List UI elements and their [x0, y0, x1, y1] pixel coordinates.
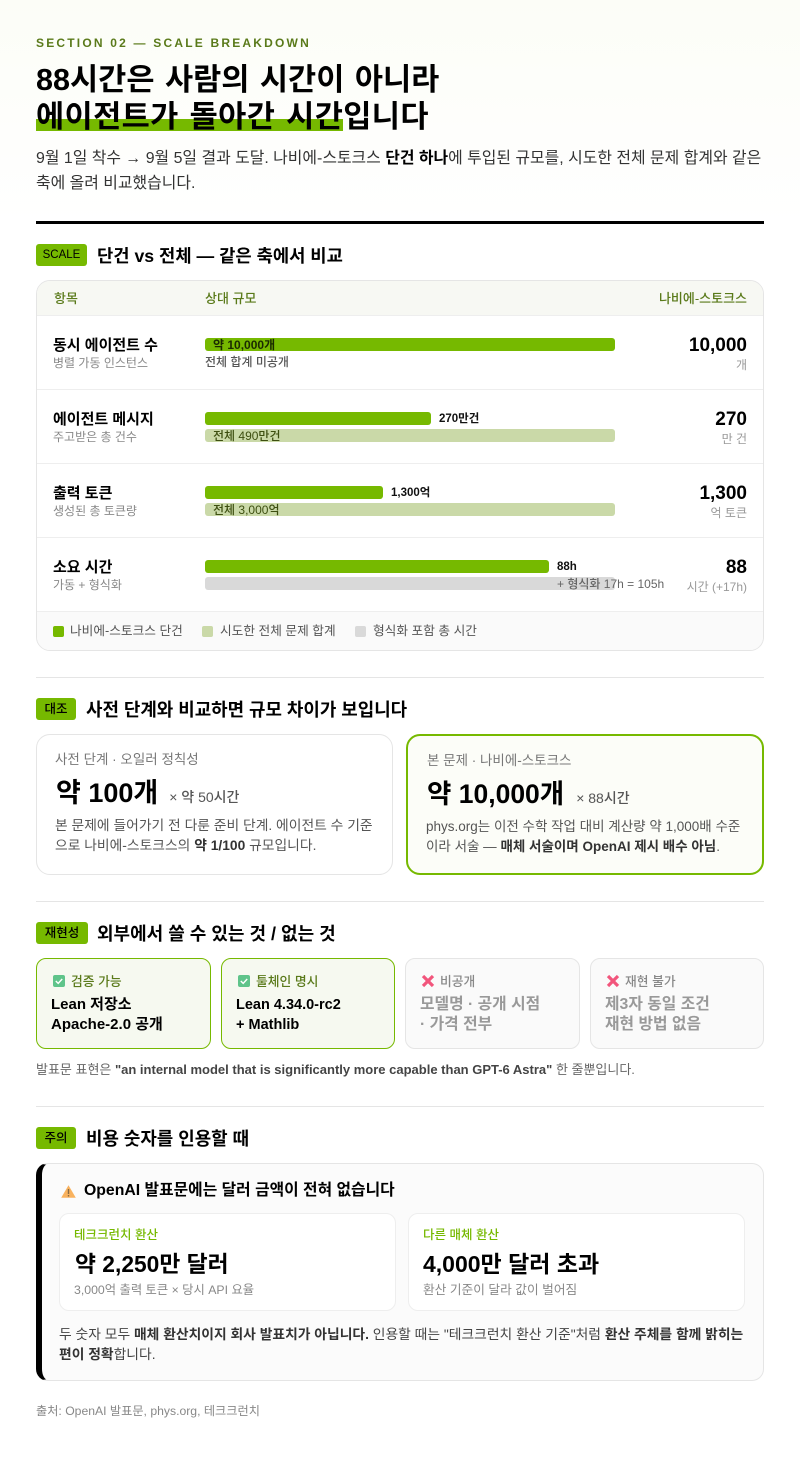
card: not reproducible — [590, 958, 764, 1049]
row: output tokens: 출력 토큰 — [53, 485, 112, 502]
heading: scale comparison: 단건 vs 전체 — 같은 축에서 비교 — [97, 246, 343, 266]
card: other media estimate: 다른 매체 환산 — [423, 1228, 499, 1242]
bar: 10,000 agents: 약 10,000개 — [213, 338, 275, 352]
card: other media estimate — [408, 1213, 745, 1311]
panel: scale comparison table — [36, 280, 764, 651]
row: output tokens: 억 토큰 — [711, 506, 747, 520]
card: verifiable: Apache-2.0 공개 — [51, 1016, 163, 1033]
icon: cross — [422, 974, 434, 988]
bar: 10,000 agents — [205, 338, 615, 351]
panel: preliminary stage card: 약 100개 × 약 50시간 — [56, 778, 239, 808]
panel: main problem card: phys.org는 이전 수학 작업 대비 계산량 약 1,000배 수준 — [426, 819, 740, 834]
panel: cost callout — [36, 1163, 764, 1381]
header rule — [36, 221, 764, 224]
bar: total 490: 전체 490만건 — [213, 429, 281, 443]
row: output tokens: 생성된 총 토큰량 — [53, 504, 137, 518]
table header row: 상대 규모 — [205, 291, 256, 306]
card: verifiable: Lean 저장소 — [51, 996, 132, 1013]
card: TechCrunch estimate: 3,000억 출력 토큰 × 당시 API 요율 — [74, 1283, 254, 1297]
lead paragraph: 축에 올려 비교했습니다. — [36, 175, 195, 192]
row: concurrent agents: 개 — [736, 358, 747, 372]
eyebrow: section label: SECTION 02 — SCALE BREAKDOWN — [36, 36, 311, 50]
card: toolchain: + Mathlib — [236, 1017, 299, 1033]
card: other media estimate: 4,000만 달러 초과 — [423, 1251, 599, 1277]
panel: preliminary stage card — [36, 734, 393, 875]
title highlight — [36, 119, 343, 131]
table header row: 나비에-스토크스 — [659, 291, 747, 306]
row: output tokens: 1,300 — [699, 483, 747, 504]
badge: caution: 주의 — [44, 1131, 68, 1145]
row: concurrent agents: 병렬 가동 인스턴스 — [53, 356, 148, 370]
panel: main problem card — [406, 734, 764, 875]
card: TechCrunch estimate: 약 2,250만 달러 — [75, 1251, 229, 1277]
row: elapsed time: 시간 (+17h) — [687, 580, 747, 594]
badge: SCALE — [36, 244, 87, 266]
lead paragraph: 9월 1일 착수 → 9월 5일 결과 도달. 나비에-스토크스 단건 하나에 투입된 규모를, 시도한 전체 문제 합계와 같은 — [36, 150, 761, 167]
legend: 형식화 포함 총 시간 — [373, 624, 477, 638]
panel: main problem card: 이라 서술 — 매체 서술이며 OpenAI 제시 배수 아님. — [426, 839, 720, 854]
card: TechCrunch estimate — [59, 1213, 396, 1311]
bar: total 490 — [205, 429, 615, 442]
icon: check — [238, 975, 250, 987]
card: not reproducible: 제3자 동일 조건 — [605, 996, 710, 1013]
title: 에이전트가 돌아간 시간입니다 — [36, 100, 429, 134]
card: toolchain: 툴체인 명시 — [256, 974, 318, 989]
heading: contrast: 사전 단계와 비교하면 규모 차이가 보입니다 — [86, 700, 407, 720]
badge: contrast — [36, 698, 76, 720]
card: toolchain: Lean 4.34.0-rc2 — [236, 997, 341, 1013]
heading: reproducibility: 외부에서 쓸 수 있는 것 / 없는 것 — [97, 924, 336, 944]
callout title: OpenAI 발표문에는 달러 금액이 전혀 없습니다 — [84, 1182, 395, 1199]
card: undisclosed — [405, 958, 580, 1049]
legend — [37, 612, 763, 650]
source: 출처: OpenAI 발표문, phys.org, 테크크런치 — [36, 1404, 260, 1418]
table header row — [37, 281, 763, 316]
panel: main problem card: 약 10,000개 × 88시간 — [427, 779, 630, 809]
card: verifiable: 검증 가능 — [71, 974, 122, 989]
row: elapsed time: + 형식화 17h = 105h — [557, 577, 664, 591]
header background tint — [0, 0, 800, 224]
card: not reproducible: 재현 불가 — [625, 974, 676, 989]
row: agent messages: 270만건 — [439, 413, 479, 425]
bar: total 3,000: 전체 3,000억 — [213, 503, 279, 517]
legend: 나비에-스토크스 단건 — [70, 624, 183, 638]
panel: preliminary stage card: 사전 단계 · 오일러 정칙성 — [55, 752, 199, 767]
card: undisclosed: 비공개 — [440, 974, 475, 989]
card: undisclosed: · 가격 전부 — [420, 1016, 492, 1033]
badge: reproducibility — [36, 922, 88, 944]
badge: contrast: 대조 — [44, 702, 68, 716]
row: agent messages: 270 — [715, 409, 747, 430]
card: undisclosed: 모델명 · 공개 시점 — [420, 996, 540, 1013]
row: agent messages — [37, 390, 763, 464]
title — [36, 63, 439, 134]
icon: warning — [61, 1185, 76, 1198]
note: announcement wording: 발표문 표현은 "an internal model that is significantly more capable than GPT-6 Astra" 한 줄뿐입니다. — [36, 1062, 635, 1077]
panel: main problem card: 본 문제 · 나비에-스토크스 — [427, 753, 571, 768]
heading: caution: 비용 숫자를 인용할 때 — [86, 1129, 249, 1149]
icon: check — [53, 975, 65, 987]
title: 88시간은 사람의 시간이 아니라 — [36, 63, 439, 97]
badge: SCALE: SCALE — [43, 249, 80, 261]
row: concurrent agents: 동시 에이전트 수 — [53, 337, 158, 354]
badge: reproducibility: 재현성 — [45, 926, 79, 940]
row: concurrent agents: 10,000 — [689, 335, 747, 356]
card: toolchain — [221, 958, 395, 1049]
legend: 시도한 전체 문제 합계 — [220, 624, 336, 638]
card: other media estimate: 환산 기준이 달라 값이 벌어짐 — [423, 1283, 577, 1297]
row: elapsed time: 88h — [557, 561, 577, 573]
row: concurrent agents — [37, 316, 763, 390]
row: elapsed time: 88 — [726, 557, 747, 578]
row: agent messages: 만 건 — [722, 432, 747, 446]
bar: 88h — [205, 560, 549, 573]
row: elapsed time — [37, 538, 763, 612]
panel: preliminary stage card: 본 문제에 들어가기 전 다룬 준비 단계. 에이전트 수 기준 — [55, 818, 373, 833]
bar: 270 — [205, 412, 431, 425]
row: output tokens — [37, 464, 763, 538]
row: elapsed time: 가동 + 형식화 — [53, 578, 122, 592]
row: concurrent agents: 전체 합계 미공개 — [205, 355, 289, 369]
row: output tokens: 1,300억 — [391, 487, 430, 499]
icon: cross — [606, 974, 620, 988]
row: elapsed time: 소요 시간 — [53, 559, 112, 576]
panel: preliminary stage card: 으로 나비에-스토크스의 약 1/100 규모입니다. — [55, 838, 316, 853]
bar: total 3,000 — [205, 503, 615, 516]
callout note: 편이 정확합니다. — [59, 1347, 156, 1362]
row: agent messages: 에이전트 메시지 — [53, 411, 154, 428]
card: TechCrunch estimate: 테크크런치 환산 — [74, 1228, 158, 1242]
callout note — [59, 1327, 743, 1362]
bar: 1,300 — [205, 486, 383, 499]
lead paragraph — [36, 149, 761, 192]
card: verifiable — [36, 958, 211, 1049]
table header row: 항목 — [54, 291, 78, 306]
callout note: 두 숫자 모두 매체 환산치이지 회사 발표치가 아닙니다. 인용할 때는 "테크크런치 환산 기준"처럼 환산 주체를 함께 밝히는 — [59, 1327, 743, 1342]
row: agent messages: 주고받은 총 건수 — [53, 430, 137, 444]
card: not reproducible: 재현 방법 없음 — [605, 1016, 701, 1033]
badge: caution — [36, 1127, 76, 1149]
bar: 105h — [205, 577, 615, 590]
